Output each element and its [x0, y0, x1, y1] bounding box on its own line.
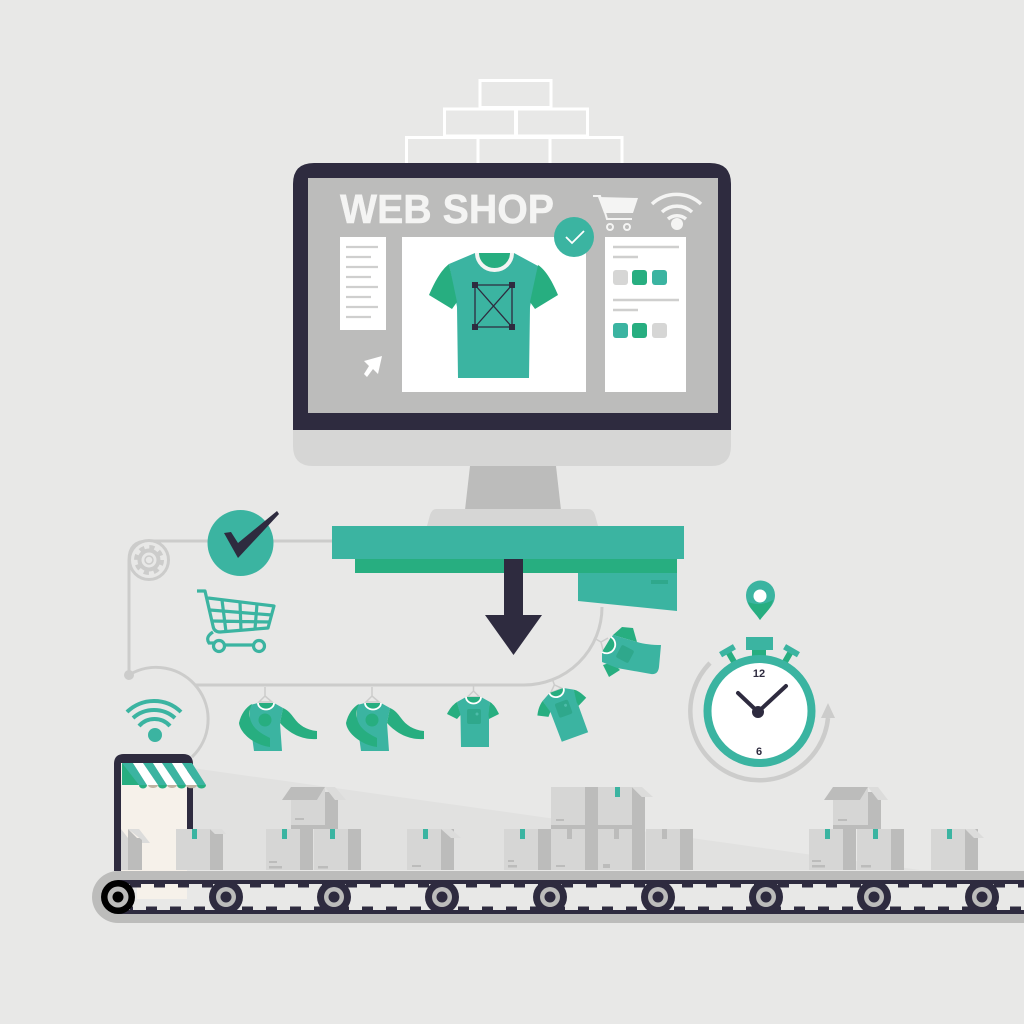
icon: white wifi: [652, 194, 701, 230]
box far right: [931, 829, 984, 870]
drive wheel: [101, 880, 135, 914]
clock face: [708, 659, 812, 763]
line end dot: [124, 670, 134, 680]
heading: web shop: WEB SHOP: [340, 186, 554, 232]
panel: right options: [605, 237, 686, 392]
machine lower plate: [355, 559, 677, 573]
light beam: [192, 768, 920, 870]
monitor frame: [293, 163, 731, 430]
monitor chin: [293, 428, 731, 466]
icon: location pin: [746, 580, 775, 620]
conveyor belt track: [118, 880, 1024, 914]
number 6: 6: [756, 746, 762, 758]
transform box: [472, 282, 515, 330]
stopwatch: [690, 637, 835, 780]
conveyor wheels: [209, 880, 999, 914]
icon: check badge: [208, 510, 279, 576]
partial box at door: [121, 829, 150, 870]
icon: approved badge: [554, 217, 594, 257]
stopwatch buttons: [719, 637, 800, 667]
panel: left text list: [340, 237, 386, 330]
open box right: [824, 787, 888, 829]
awning: [122, 763, 206, 788]
number 12: 12: [753, 668, 765, 680]
brick wall outline: [406, 80, 622, 163]
circular arrow: [690, 663, 835, 780]
t-shirt on screen: [429, 253, 558, 378]
machine: [332, 526, 684, 655]
box 4: [407, 829, 461, 870]
conveyor frame: [92, 871, 1024, 923]
box 3: [314, 829, 361, 870]
clock hands: [738, 686, 786, 718]
t-shirt straight: [447, 686, 499, 747]
panel: product view: [402, 237, 586, 392]
t-shirt swinging: [594, 627, 661, 677]
box group centre top: [551, 787, 653, 829]
open box on top: [282, 787, 346, 829]
hanging shirts: [239, 627, 661, 751]
monitor: [293, 163, 731, 466]
box 2: [266, 829, 313, 870]
icon: cursor arrow: [364, 356, 382, 377]
machine top plate: [332, 526, 684, 559]
icon: teal wifi: [127, 701, 181, 742]
t-shirt tilted: [528, 671, 598, 747]
long-sleeve shirt 1: [239, 687, 317, 751]
box group right: [809, 829, 904, 870]
arrow: down: [485, 559, 542, 655]
dispensing tray: [578, 573, 677, 611]
icon: teal cart: [197, 591, 274, 652]
icon: gear: [130, 540, 168, 580]
box 1: [176, 829, 226, 870]
monitor stand: [427, 466, 598, 526]
conveyor belt: [92, 871, 1024, 923]
icon: white cart: [593, 196, 638, 230]
storefront phone: [114, 754, 206, 899]
screen: [308, 178, 718, 413]
boxes on conveyor: [121, 787, 984, 870]
long-sleeve shirt 2: [346, 687, 424, 751]
process line: [129, 541, 602, 757]
box group centre bottom: [504, 829, 693, 870]
